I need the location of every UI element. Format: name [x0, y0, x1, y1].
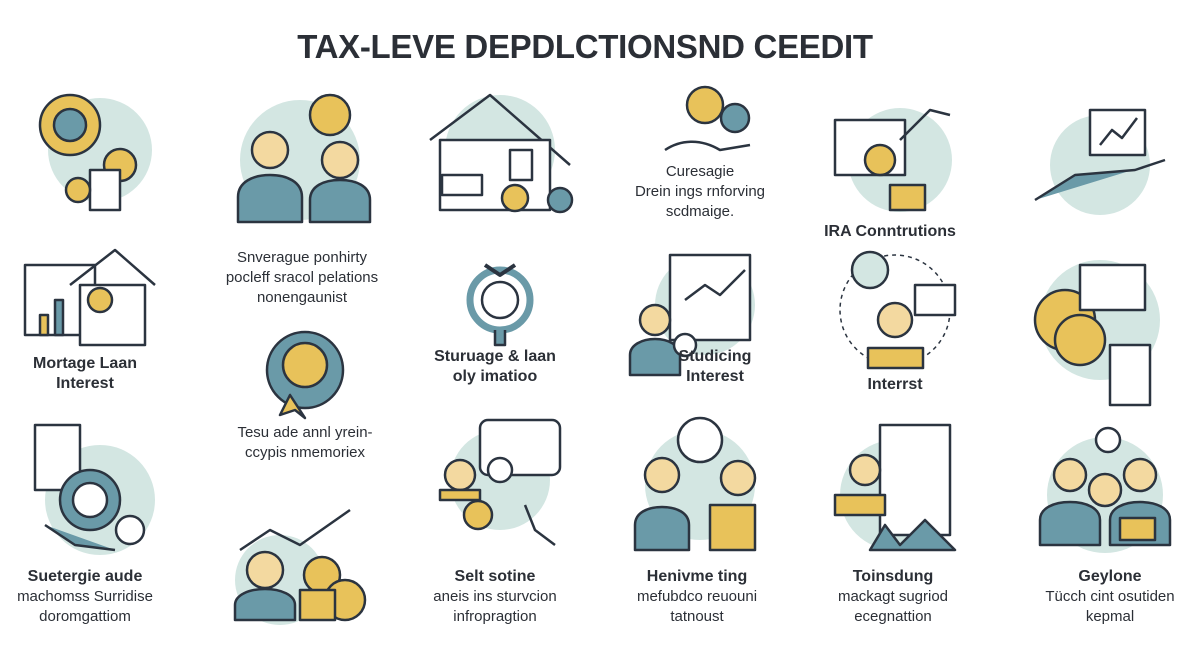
label: Studicing Interest: Studicing	[679, 348, 751, 365]
text: Curesagie: Curesagie	[666, 163, 734, 180]
label: Toinsdung: mackagt sugriod	[838, 588, 948, 605]
label: Selt sotine	[433, 568, 557, 625]
label: Mortage Laan Interest	[33, 355, 137, 392]
label: Selt sotine: Selt sotine	[455, 568, 535, 585]
label: Selt sotine: infropragtion	[453, 608, 537, 625]
label: Geylone	[1045, 568, 1175, 625]
label: Sturuage & laan: oly imatioo	[453, 368, 537, 385]
title: TAX-LEVE DEPDLCTIONSND CEEDIT	[297, 28, 873, 65]
label: Geylone: Tücch cint osutiden	[1045, 588, 1175, 605]
icon: browser hand coins	[835, 108, 952, 212]
text: Curesagie: Drein ings rnforving	[635, 183, 765, 200]
label: Suetergie aude	[17, 568, 153, 625]
text: Snverague: pocleff sracol pelations	[226, 269, 378, 286]
icon: house chart	[25, 250, 155, 345]
label: Studicing Interest	[679, 348, 751, 385]
label: Selt sotine: aneis ins sturvcion	[433, 588, 557, 605]
label: Toinsdung: ecegnattion	[854, 608, 932, 625]
icon: money bag circle	[267, 332, 343, 418]
label: Mortage Laan Interest: Mortage Laan	[33, 355, 137, 372]
label: Henivme ting: tatnoust	[670, 608, 724, 625]
icon: people with lightbulb	[635, 418, 755, 550]
text: Tesu ade: Tesu ade annl yrein-	[237, 424, 373, 441]
text: Curesagie: scdmaige.	[666, 203, 734, 220]
label: Henivme ting: Henivme ting	[647, 568, 747, 585]
icon: three people	[1040, 428, 1170, 553]
text: Snverague	[226, 249, 378, 306]
icon: browser magnifier	[35, 425, 155, 555]
icon: hand chart	[1035, 110, 1165, 215]
icon: two people with gear	[238, 95, 370, 222]
label: Suetergie aude: Suetergie aude	[28, 568, 142, 585]
text: Tesu ade	[237, 424, 373, 461]
label: IRA Conntrutions: IRA Conntrutions	[824, 223, 956, 240]
icon: person and coins	[235, 510, 365, 625]
label: Sturuage & laan: Sturuage & laan	[434, 348, 556, 365]
label: Toinsdung	[838, 568, 948, 625]
label: Henivme ting	[637, 568, 757, 625]
label: Mortage Laan Interest: Interest	[56, 375, 114, 392]
icon: person and document	[835, 425, 955, 550]
label: Interrst: Interrst	[867, 376, 923, 393]
text: Tesu ade: ccypis nmemoriex	[245, 444, 365, 461]
label: Suetergie aude: machomss Surridise	[17, 588, 153, 605]
icon: chat and person	[440, 420, 560, 545]
label: Toinsdung: Toinsdung	[853, 568, 933, 585]
icon: clipboard and person	[630, 255, 755, 375]
icon: money bag	[470, 265, 530, 345]
text: Snverague: Snverague ponhirty	[237, 249, 367, 266]
label: Geylone: Geylone	[1078, 568, 1142, 585]
icon: house	[430, 95, 572, 212]
icon: bear and person	[840, 252, 955, 368]
icon: coins and hand	[665, 87, 750, 150]
label: Geylone: kepmal	[1086, 608, 1134, 625]
label: Suetergie aude: doromgattiom	[39, 608, 131, 625]
label: Sturuage & laan	[434, 348, 556, 385]
text: Snverague: nonengaunist	[257, 289, 347, 306]
text: Curesagie	[635, 163, 765, 220]
icon: gears and coins	[40, 95, 152, 210]
label: Henivme ting: mefubdco reuouni	[637, 588, 757, 605]
icon: coin circle	[1035, 260, 1160, 405]
label: Studicing Interest: Interest	[686, 368, 744, 385]
